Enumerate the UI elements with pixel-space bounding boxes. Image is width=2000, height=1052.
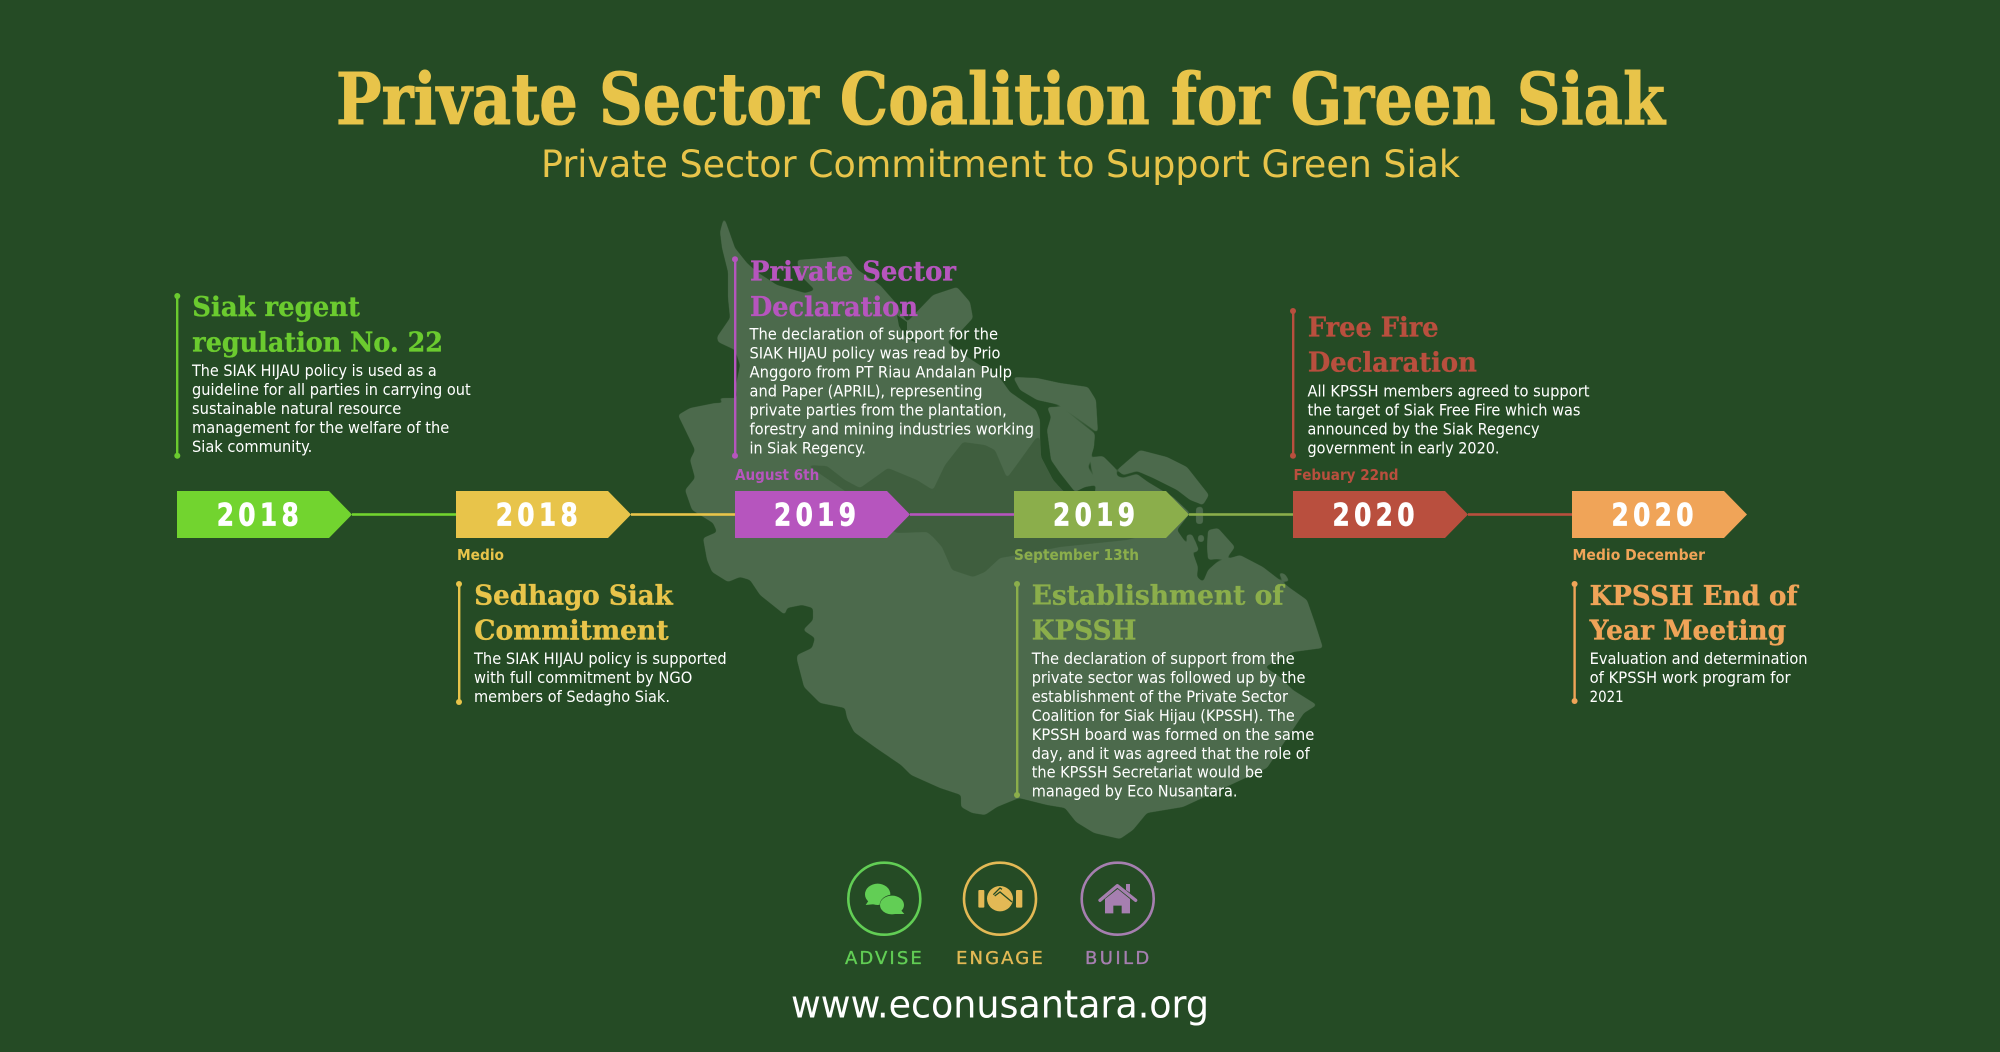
arrow: 2019 september: 2019 [1053,497,1135,533]
panel: Establishment of KPSSH: KPSSH board was formed on the same [1032,726,1314,744]
arrow: 2020 december [1572,491,1747,538]
arrow: 2018: 2018 [217,497,299,533]
panel: KPSSH End of Year Meeting [1572,546,1808,706]
panel: Establishment of KPSSH: Coalition for Siak Hijau (KPSSH). The [1032,707,1295,725]
map of Siak Regency [678,217,1323,839]
panel: Private Sector Declaration: private parties from the plantation, [750,402,1007,420]
panel: Free Fire Declaration: announced by the Siak Regency [1308,420,1540,438]
panel: KPSSH End of Year Meeting: Year Meeting [1589,615,1786,646]
panel: Siak regent regulation: The SIAK HIJAU policy is used as a [191,362,437,380]
panel: Establishment of KPSSH: The declaration of support from the [1031,650,1295,668]
subtitle: Private Sector Commitment to Support Green Siak [541,143,1461,186]
panel: Siak regent regulation: Siak regent [192,292,361,323]
panel: Siak regent regulation: management for the welfare of the [192,419,449,437]
panel: Sedhago Siak Commitment: Commitment [474,615,669,646]
panel: Establishment of KPSSH: establishment of the Private Sector [1032,688,1289,706]
label: ENGAGE: ENGAGE [956,948,1043,969]
panel: Establishment of KPSSH: managed by Eco Nusantara. [1032,783,1238,801]
panel: Sedhago Siak Commitment: The SIAK HIJAU policy is supported [473,650,727,668]
panel: Private Sector Declaration: August 6th [735,466,819,484]
panel: KPSSH End of Year Meeting: of KPSSH work program for [1590,669,1791,687]
arrow: 2020 february [1293,491,1468,538]
panel: KPSSH End of Year Meeting: Medio December [1572,546,1705,564]
panel: Establishment of KPSSH: Establishment of [1032,580,1286,611]
panel: Sedhago Siak Commitment: with full commitment by NGO [474,669,692,687]
panel: Siak regent regulation [174,292,471,459]
panel: Private Sector Declaration: Anggoro from PT Riau Andalan Pulp [750,364,1012,382]
panel: Private Sector Declaration: SIAK HIJAU policy was read by Prio [750,345,1000,363]
panel: Private Sector Declaration: Private Sector [750,257,957,288]
panel: Private Sector Declaration: and Paper (APRIL), representing [750,383,982,401]
panel: Siak regent regulation: guideline for all parties in carrying out [192,381,471,399]
arrow: 2019 august: 2019 [774,497,856,533]
panel: Siak regent regulation: regulation No. 22 [192,328,443,359]
panel: Free Fire Declaration: All KPSSH members agreed to support [1308,382,1590,400]
panel: Free Fire Declaration [1290,308,1590,484]
label: BUILD: BUILD [1085,948,1149,969]
panel: Siak regent regulation: sustainable natural resource [192,400,401,418]
icon: advise chat bubbles [848,863,920,935]
arrow: 2019 september [1014,491,1189,538]
title: Private Sector Coalition for Green Siak [336,57,1667,141]
panel: Free Fire Declaration: the target of Siak Free Fire which was [1308,401,1580,419]
panel: Siak regent regulation: Siak community. [192,438,312,456]
panel: Private Sector Declaration [732,256,1034,484]
panel: Establishment of KPSSH: September 13th [1014,546,1139,564]
arrow: 2019 august [735,491,910,538]
arrow: 2018 [177,491,352,538]
panel: Establishment of KPSSH: day, and it was agreed that the role of [1032,745,1310,763]
panel: Private Sector Declaration: The declaration of support for the [749,326,998,344]
arrow: 2020 december: 2020 [1612,497,1694,533]
panel: Free Fire Declaration: Free Fire [1308,313,1439,344]
panel: Private Sector Declaration: forestry and mining industries working [750,420,1034,438]
website url: www.econusantara.org [791,983,1209,1027]
panel: Sedhago Siak Commitment [456,546,727,706]
arrow: 2018 medio: 2018 [496,497,578,533]
panel: Free Fire Declaration: Declaration [1308,348,1477,378]
panel: Free Fire Declaration: government in early 2020. [1308,439,1500,457]
panel: Establishment of KPSSH: KPSSH [1032,615,1136,646]
panel: Private Sector Declaration: in Siak Regency. [750,440,866,458]
icon: engage handshake [964,863,1036,935]
panel: Free Fire Declaration: Febuary 22nd [1294,466,1398,484]
panel: KPSSH End of Year Meeting: 2021 [1590,688,1624,706]
label: ADVISE: ADVISE [845,948,922,969]
panel: Sedhago Siak Commitment: Medio [457,546,504,564]
icon: build house [1082,863,1154,935]
timeline connector lines [352,513,1572,516]
panel: Establishment of KPSSH: private sector was followed up by the [1032,669,1305,687]
panel: Sedhago Siak Commitment: members of Sedagho Siak. [474,688,670,706]
panel: KPSSH End of Year Meeting: Evaluation and determination [1590,650,1808,668]
arrow: 2018 medio [456,491,631,538]
panel: Sedhago Siak Commitment: Sedhago Siak [474,580,674,611]
panel: Establishment of KPSSH: the KPSSH Secretariat would be [1032,764,1263,782]
panel: Private Sector Declaration: Declaration [750,292,918,323]
arrow: 2020 february: 2020 [1332,497,1415,533]
panel: KPSSH End of Year Meeting: KPSSH End of [1590,581,1800,612]
panel: Establishment of KPSSH [1014,546,1314,801]
